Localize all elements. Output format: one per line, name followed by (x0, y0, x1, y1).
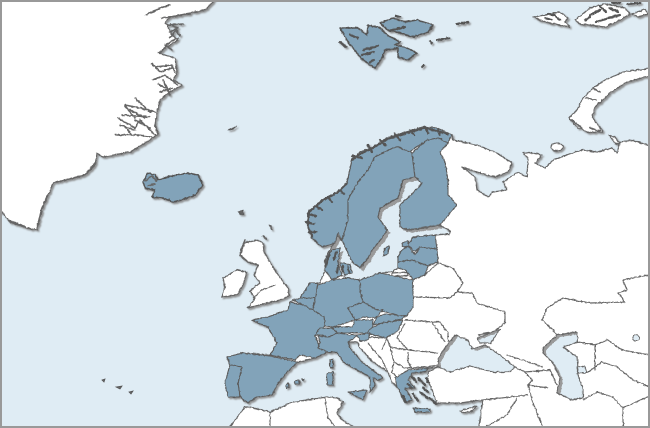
Great Britain (240, 225, 289, 308)
Gotland and Saaremaa (383, 241, 409, 256)
Slovakia (373, 314, 405, 325)
Norway (307, 127, 452, 247)
Norway fjord coast (306, 127, 448, 236)
Finnish south coast (400, 225, 450, 231)
Africa (226, 397, 362, 428)
Estonia (408, 235, 437, 252)
Sicily (348, 390, 367, 400)
Czech Republic (348, 302, 383, 320)
Cyprus (460, 406, 477, 413)
Novaya Zemlya (569, 68, 650, 132)
Switzerland (315, 328, 338, 337)
Finland (400, 138, 457, 230)
Poland (360, 273, 413, 317)
Sardinia and Corsica (327, 359, 333, 385)
Denmark (325, 248, 352, 280)
Netherlands (300, 283, 318, 298)
Svalbard (340, 16, 468, 68)
Jan Mayen and Faroe (228, 126, 244, 215)
Portugal (225, 365, 242, 397)
Kolguev and Vaygach (551, 135, 621, 151)
Ireland (222, 270, 247, 297)
Black Sea (438, 335, 518, 374)
Franz Josef Land (533, 3, 648, 27)
Greece (395, 368, 436, 412)
Balearic Islands (286, 379, 304, 388)
Belgium (293, 298, 315, 310)
Iceland (143, 173, 203, 202)
Caspian Sea (543, 332, 586, 402)
Italy (318, 333, 383, 392)
France (252, 302, 328, 360)
Austria (332, 320, 373, 333)
Sea of Azov (477, 329, 502, 345)
Kaliningrad (392, 272, 408, 276)
Greenland (0, 0, 216, 230)
Baltic Sea (328, 177, 453, 283)
Lithuania (398, 260, 428, 280)
Kara-Bogaz and Aral (577, 335, 640, 373)
Germany (313, 278, 363, 327)
Azores (102, 379, 133, 394)
Sweden (342, 147, 415, 267)
Spain (227, 353, 298, 403)
Eurasia mainland (225, 127, 650, 428)
Latvia (398, 246, 438, 266)
Slovenia (357, 333, 370, 341)
Hungary (367, 320, 403, 338)
non-member borders (253, 263, 650, 428)
